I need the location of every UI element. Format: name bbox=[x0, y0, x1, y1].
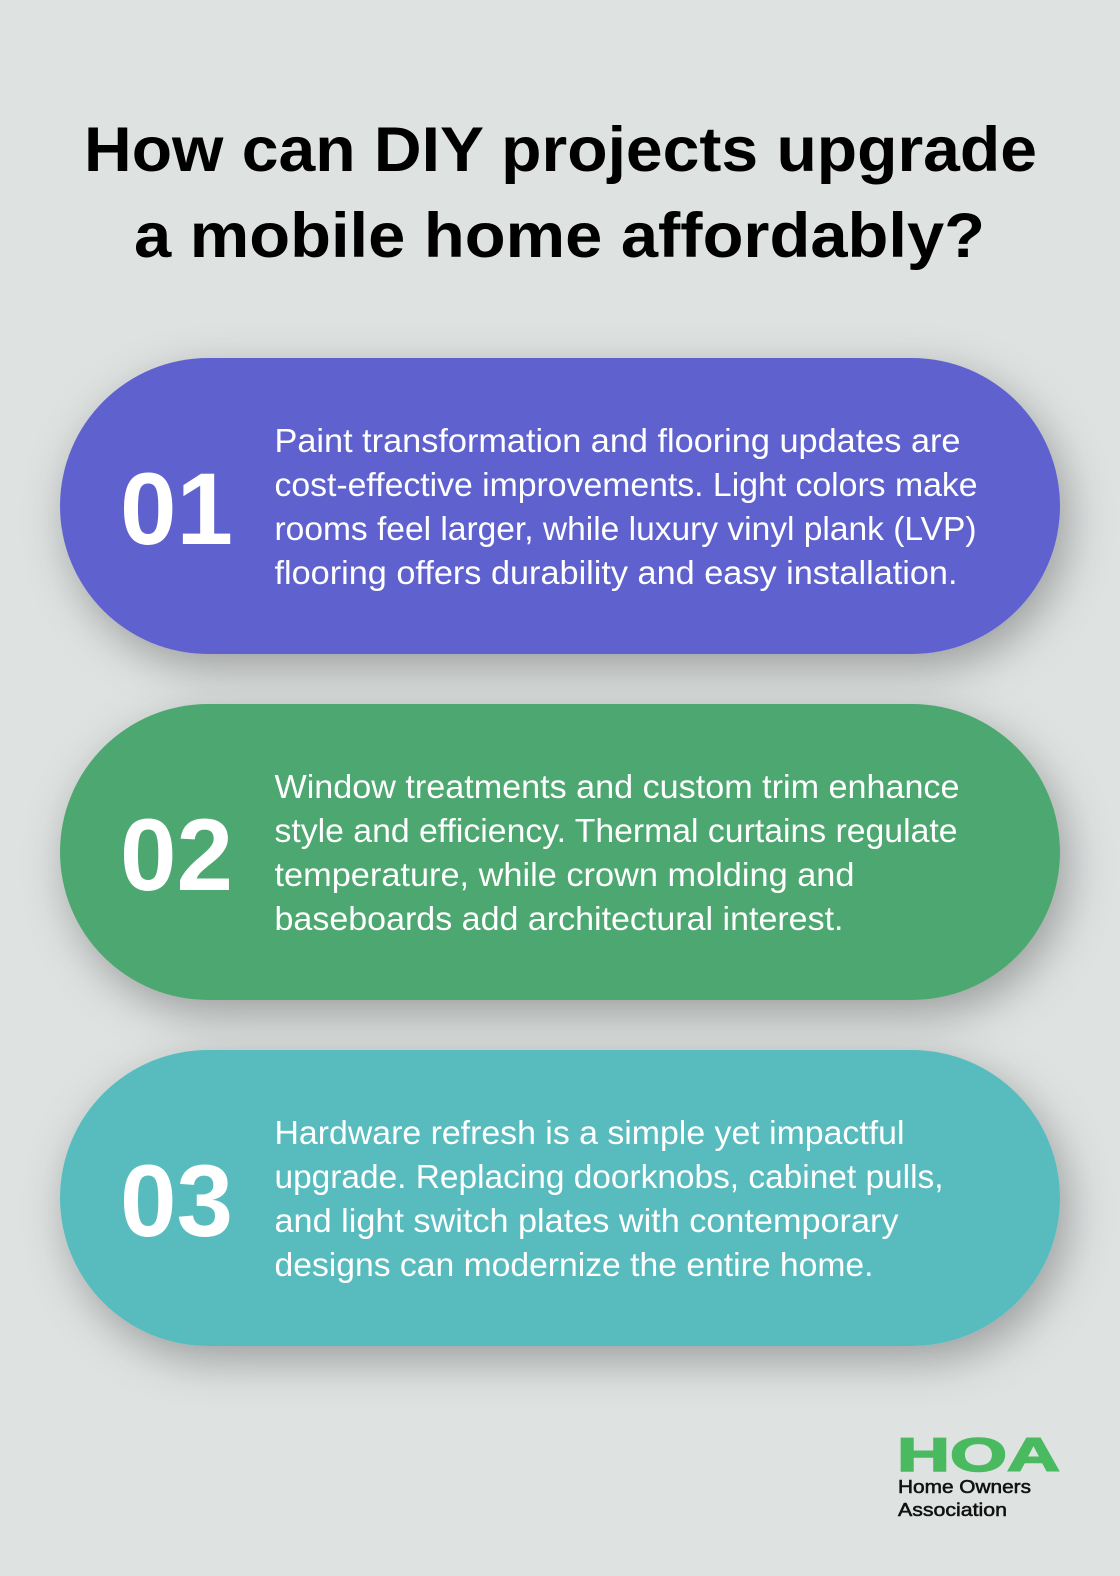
panel: step 03 bbox=[60, 1050, 1060, 1346]
panel: step 02 bbox=[60, 704, 1060, 1000]
step 02 text: Window treatments and custom trim enhance bbox=[274, 768, 960, 805]
title: a mobile home affordably? bbox=[134, 201, 985, 271]
step 01 text: Paint transformation and flooring updates are bbox=[274, 422, 960, 459]
title bbox=[84, 115, 1037, 271]
panel: step 01 bbox=[60, 358, 1060, 654]
step 01 text: flooring offers durability and easy installation. bbox=[274, 554, 958, 591]
step 02 text: baseboards add architectural interest. bbox=[274, 900, 844, 937]
teal pill background bbox=[60, 1050, 1060, 1346]
step 03 text bbox=[274, 1114, 944, 1283]
logo: HOA Home Owners Association bbox=[897, 1428, 1060, 1520]
step 01 text bbox=[274, 422, 978, 591]
step 03 text: upgrade. Replacing doorknobs, cabinet pulls, bbox=[274, 1158, 944, 1195]
step number 03: 03 bbox=[120, 1144, 233, 1258]
step 02 text bbox=[274, 768, 960, 937]
step 01 text: rooms feel larger, while luxury vinyl plank (LVP) bbox=[274, 510, 976, 547]
title: How can DIY projects upgrade bbox=[84, 115, 1037, 185]
purple pill background bbox=[60, 358, 1060, 654]
step 02 text: temperature, while crown molding and bbox=[274, 856, 854, 893]
logo wordmark bbox=[898, 1476, 1031, 1520]
step 02 text: style and efficiency. Thermal curtains regulate bbox=[274, 812, 958, 849]
green pill background bbox=[60, 704, 1060, 1000]
step number 01: 01 bbox=[120, 452, 233, 566]
step number 02: 02 bbox=[120, 798, 233, 912]
logo wordmark: Association bbox=[898, 1499, 1007, 1520]
step 03 text: and light switch plates with contemporary bbox=[274, 1202, 899, 1239]
logo wordmark: Home Owners bbox=[898, 1476, 1031, 1497]
step 01 text: cost-effective improvements. Light colors make bbox=[274, 466, 978, 503]
step 03 text: designs can modernize the entire home. bbox=[274, 1246, 874, 1283]
step 03 text: Hardware refresh is a simple yet impactful bbox=[274, 1114, 904, 1151]
logo mark HOA: HOA bbox=[897, 1428, 1060, 1481]
